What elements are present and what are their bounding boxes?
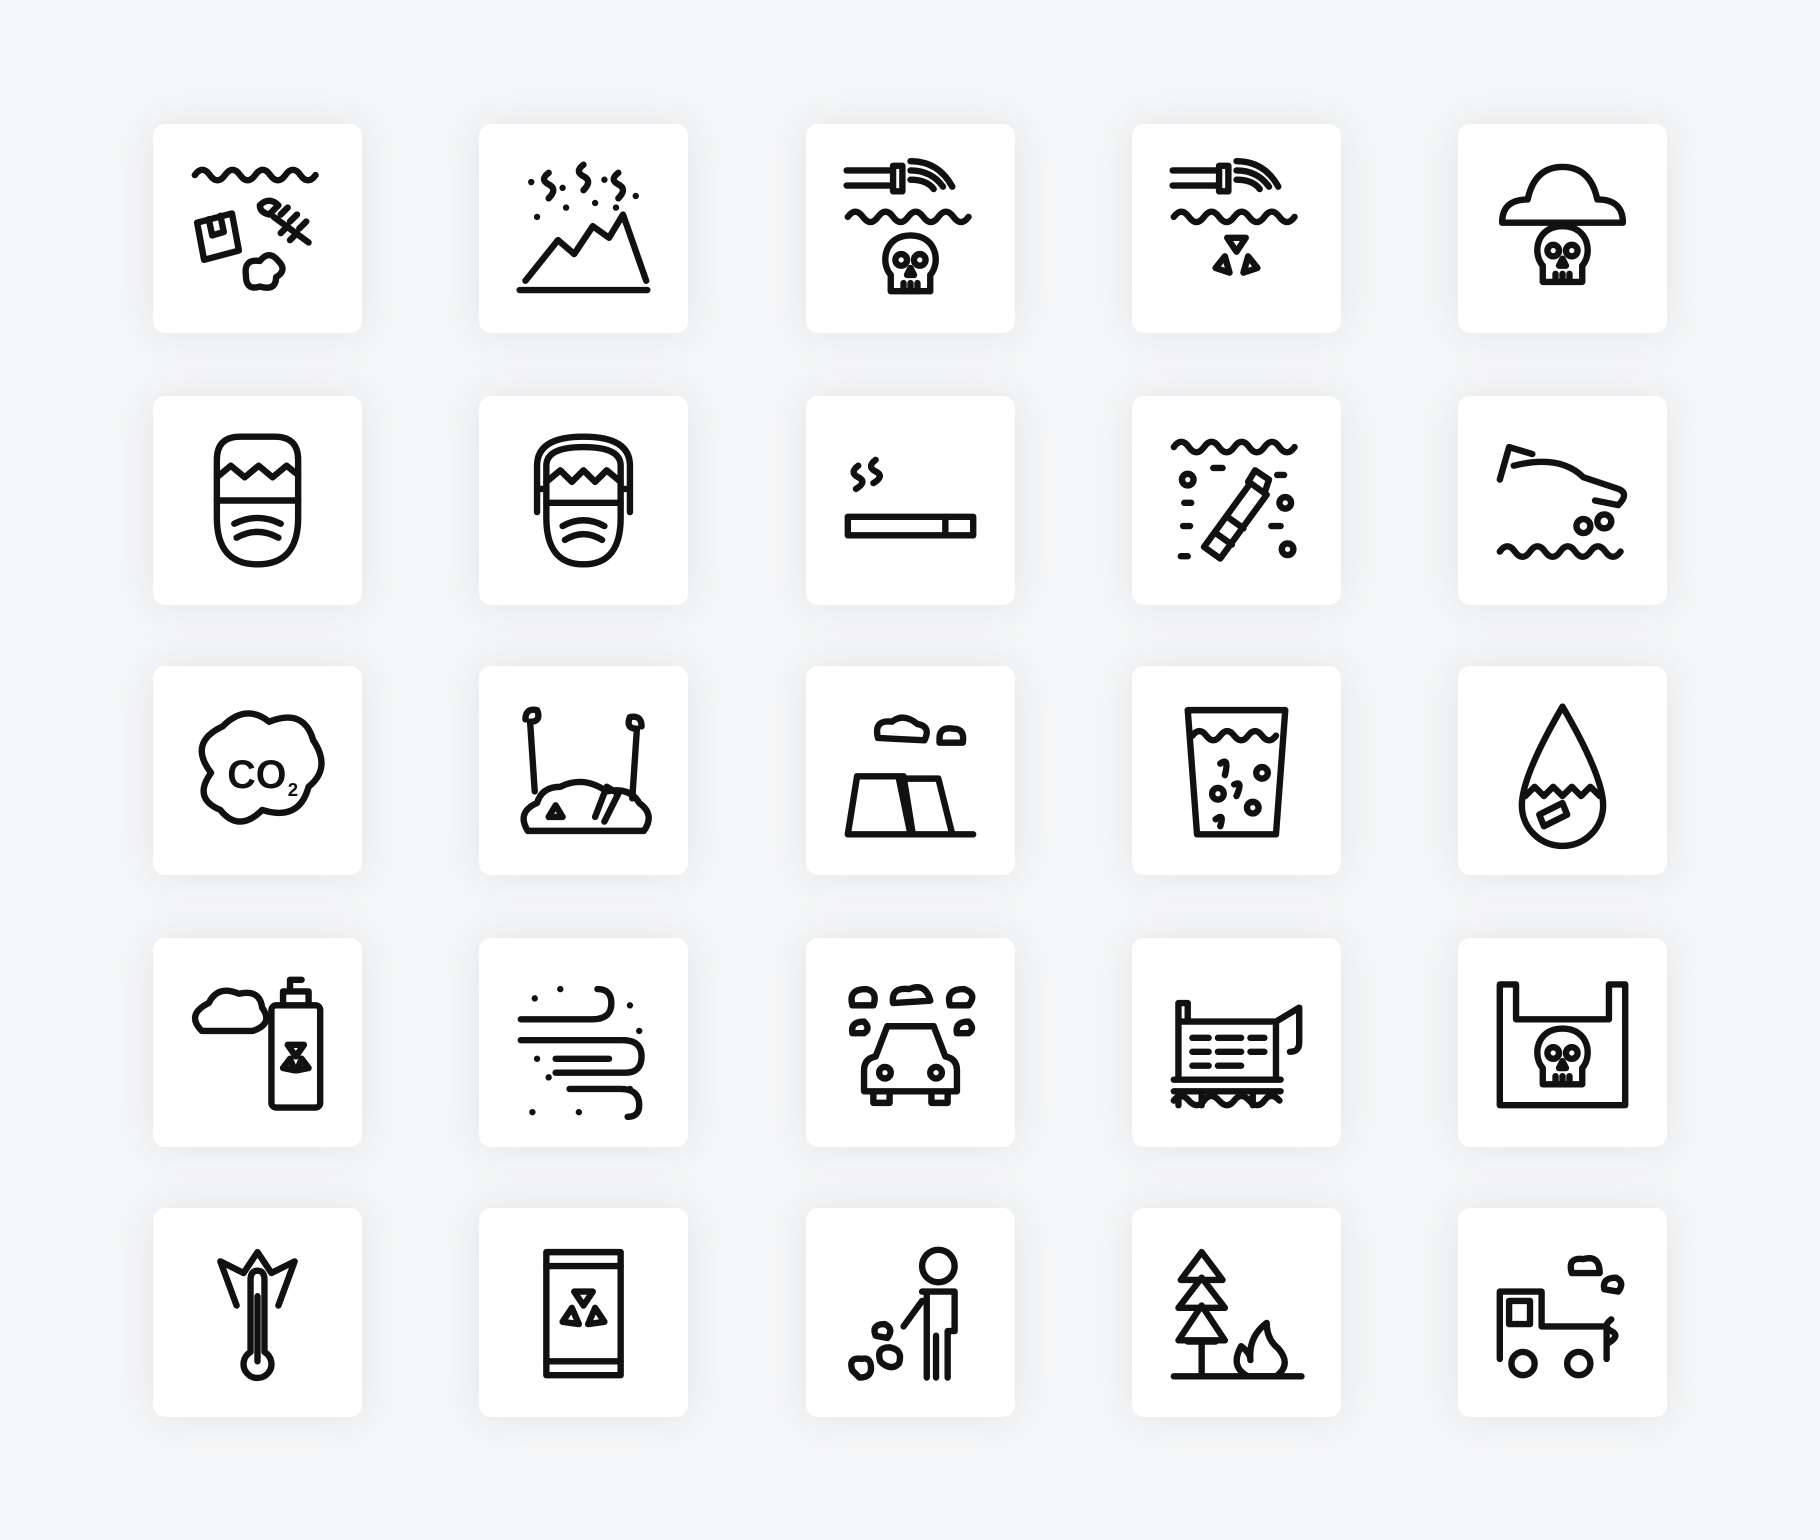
card: CO2 cloud: 2	[288, 779, 298, 800]
card: toxic cloud skull	[1458, 124, 1667, 333]
card: garbage pile	[479, 666, 688, 875]
card: dirty glass	[1132, 666, 1341, 875]
card: CO2 cloud	[153, 666, 362, 875]
card: face mask	[153, 396, 362, 605]
card: landfill mountain	[479, 124, 688, 333]
card: pipe radioactive water	[1132, 124, 1341, 333]
card: toxic bag	[1458, 938, 1667, 1147]
card: spray can cloud	[153, 938, 362, 1147]
card: cigarette	[806, 396, 1015, 605]
card: hooded face mask	[479, 396, 688, 605]
card: forest fire	[1132, 1208, 1341, 1417]
card: factory cooling towers	[806, 666, 1015, 875]
card: oil rig	[1132, 938, 1341, 1147]
card: wind dust	[479, 938, 688, 1147]
card: polluted water drop	[1458, 666, 1667, 875]
card: CO2 cloud: CO	[227, 753, 287, 797]
card: truck exhaust	[1458, 1208, 1667, 1417]
card: water waste	[153, 124, 362, 333]
card: car smoke	[806, 938, 1015, 1147]
card: hand dropping trash	[1458, 396, 1667, 605]
card: plastic bottle in water	[1132, 396, 1341, 605]
card: radioactive barrel	[479, 1208, 688, 1417]
card: pipe toxic water	[806, 124, 1015, 333]
card: person littering	[806, 1208, 1015, 1417]
card: thermometer heat	[153, 1208, 362, 1417]
